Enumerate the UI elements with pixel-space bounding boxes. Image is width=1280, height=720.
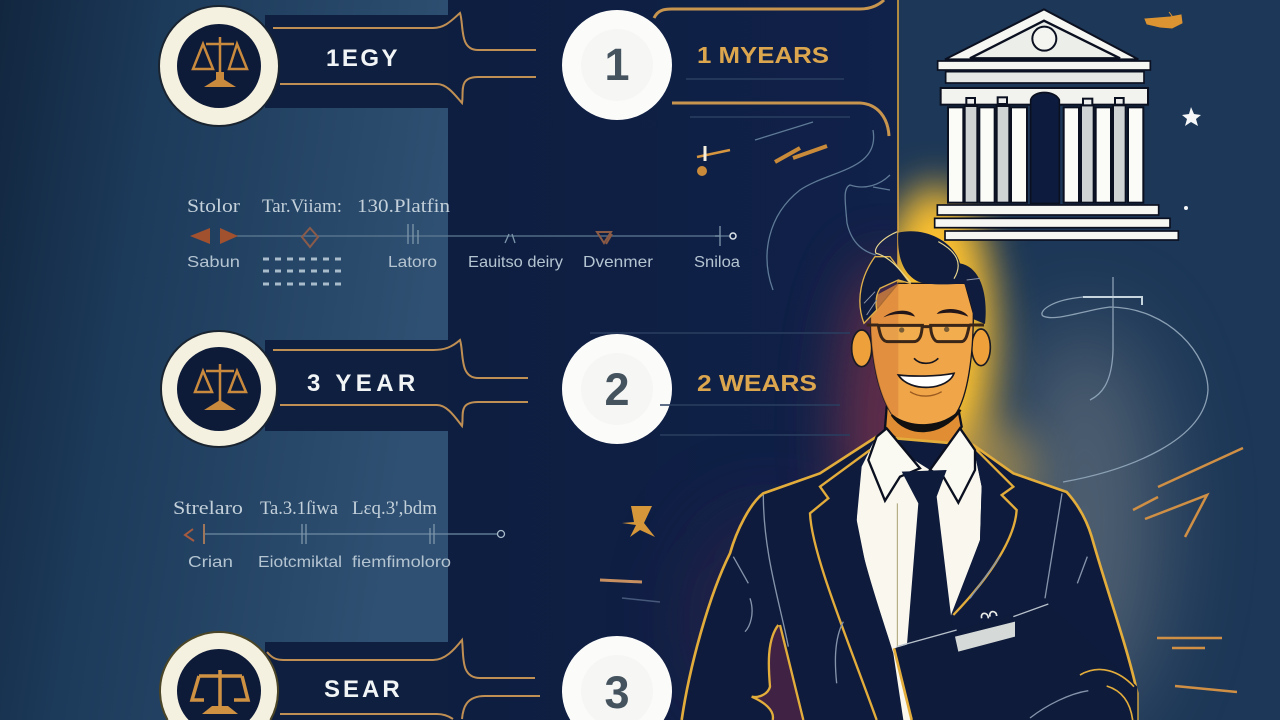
timeline 1 bottom labels: Sabun: [187, 254, 240, 271]
row 1 years label: 1 MYEARS: [697, 42, 829, 68]
timeline 1: Latoro: [388, 254, 437, 271]
icon: orange sparkle: [697, 146, 730, 176]
timeline 2 markers: [185, 529, 194, 541]
icon: scales of justice: [192, 670, 248, 714]
thin sketch curves: [1042, 277, 1208, 482]
row 2 years label: 2 WEARS: [697, 370, 817, 396]
jacket seams: [733, 493, 1087, 683]
centre decorative marks: [600, 122, 890, 602]
small dash grid: [263, 259, 346, 284]
row 3 number circle: [562, 636, 672, 720]
hair: [860, 231, 986, 324]
timeline 2 top labels: Strelaro: [173, 498, 243, 519]
icon: orange chair-like star: [622, 506, 655, 537]
shirt: [857, 437, 982, 720]
panel divider line: [897, 0, 899, 720]
row 3 number circle: 3: [604, 667, 630, 718]
panel: left background: [0, 0, 448, 720]
icon: white star: [1182, 107, 1201, 126]
timeline 1: 130.Platfin: [357, 196, 451, 217]
row 1 scales badge: [159, 6, 279, 126]
icon: orange sparkle top right: [1145, 12, 1182, 28]
timeline 1 top labels: Stolor: [187, 196, 241, 217]
row 2 banner label: 3 YEAR: [307, 370, 420, 397]
row 1 right frame lines: [654, 0, 889, 136]
icon: orange dashes: [775, 146, 827, 162]
row 2 scales badge: [161, 331, 277, 447]
row 1 number circle: [562, 10, 672, 120]
head and neck: [852, 283, 990, 470]
row 2 number circle: [562, 334, 672, 444]
icon: courthouse: [935, 9, 1178, 240]
timeline 2: Eiotcmiktal: [258, 554, 342, 571]
row 2 number circle: 2: [604, 364, 630, 415]
icon: scales of justice: [193, 37, 247, 87]
icon: scales of justice: [195, 364, 246, 410]
row 1 number circle: 1: [604, 39, 630, 90]
row 2 left banner: [265, 340, 528, 431]
row 1 left banner: [265, 13, 536, 108]
timeline 2: Lɛq.3',bdm: [352, 498, 437, 519]
orange dash marks: [600, 580, 642, 582]
nose and mouth: [898, 358, 954, 396]
timeline 2 bottom labels: Crian: [188, 554, 233, 571]
lapels: [810, 447, 1017, 720]
row 1 banner label: 1EGY: [326, 45, 400, 72]
clipboard: [894, 603, 1137, 720]
orange strokes: [1133, 448, 1243, 692]
timeline 1: Tar.Viiam:: [262, 196, 342, 217]
panel: centre background: [448, 0, 898, 720]
figure: lawyer: [682, 231, 1137, 720]
timeline 1: Dvenmer: [583, 254, 654, 271]
timeline 1: [187, 196, 740, 284]
yellow and grey glow behind figure: [875, 185, 1160, 720]
collar: [868, 428, 975, 503]
tie: [902, 470, 953, 648]
row 3 left banner: [265, 640, 540, 720]
timeline 2: [173, 498, 504, 571]
timeline 2: Ta.3.1ſiwa: [260, 498, 339, 519]
glasses: [867, 325, 984, 342]
purple glow behind figure: [684, 240, 897, 663]
right decorative marks: [1042, 12, 1243, 692]
timeline 1 arrow markers: [190, 228, 238, 244]
row 3 scales badge: [160, 632, 278, 720]
jacket: [682, 437, 1137, 720]
arm gap: [752, 625, 803, 720]
panel: right background: [898, 0, 1280, 720]
brows and eyes: [883, 309, 968, 333]
timeline 2: fiemfimoloro: [352, 554, 451, 571]
row 3 banner label: SEAR: [324, 676, 403, 703]
timeline 1: Sniloa: [694, 254, 740, 271]
timeline 1: Eauitso deiry: [468, 254, 563, 271]
